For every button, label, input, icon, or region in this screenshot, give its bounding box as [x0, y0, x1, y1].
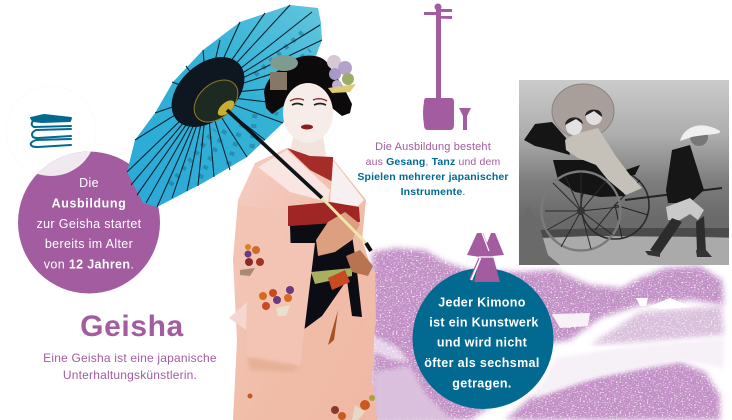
training age text: von 12 Jahren. — [44, 258, 134, 272]
kimono text: und wird nicht — [437, 336, 528, 350]
icon: books — [31, 115, 71, 147]
icon background: dotted white circle — [6, 86, 96, 176]
hair — [264, 56, 352, 116]
training age text: zur Geisha startet — [37, 217, 142, 231]
umbrella shadows of leaves — [170, 30, 310, 185]
dotted overlap of the circles — [38, 152, 91, 176]
icon: shamisen — [423, 4, 471, 130]
icon: kimono — [467, 233, 504, 282]
kimono text — [424, 296, 540, 390]
photo puller — [666, 145, 704, 203]
face — [283, 83, 333, 143]
field highlight — [534, 338, 724, 398]
kimono flower patterns — [240, 244, 375, 420]
photo: rickshaw — [519, 80, 729, 265]
subtitle: Unterhaltungskünstlerin. — [63, 368, 197, 382]
training text — [357, 141, 509, 198]
training age text: Die — [79, 176, 99, 190]
collar — [287, 148, 333, 182]
kimono text: öfter als sechsmal — [424, 356, 540, 370]
umbrella — [127, 5, 322, 207]
subtitle — [43, 351, 217, 382]
training age text: bereits im Alter — [45, 237, 133, 251]
photo front wheel — [542, 172, 620, 250]
meadow — [590, 306, 724, 345]
kimono text: ist ein Kunstwerk — [429, 316, 539, 330]
title: Geisha — [80, 310, 184, 343]
obi — [288, 202, 360, 226]
hair flowers — [327, 55, 356, 93]
training text: aus Gesang, Tanz und dem — [366, 156, 500, 168]
umbrella shaft — [227, 110, 322, 198]
left sleeve — [233, 205, 315, 366]
training text: Die Ausbildung besteht — [375, 141, 491, 153]
hands — [316, 212, 360, 256]
hair ornament — [270, 55, 298, 90]
bridge — [552, 313, 590, 328]
river — [374, 366, 452, 420]
panel: kimono circle — [412, 268, 554, 409]
photo rear wheel — [581, 171, 649, 239]
body — [233, 148, 377, 420]
black underbelt — [290, 222, 362, 330]
umbrella hub — [158, 43, 258, 141]
photo ground — [519, 233, 729, 265]
photo women — [565, 128, 642, 195]
training text: Instrumente. — [401, 186, 465, 198]
training text: Spielen mehrerer japanischer — [357, 171, 509, 183]
subtitle: Eine Geisha ist eine japanische — [43, 351, 217, 365]
geisha — [227, 55, 377, 420]
training age text — [37, 176, 142, 272]
plectrum — [459, 108, 471, 130]
photo carriage — [524, 122, 570, 155]
photo parasol — [552, 84, 614, 138]
landscape engraving background — [372, 248, 724, 420]
neck — [290, 130, 326, 170]
umbrella ribs — [127, 5, 322, 207]
kimono text: getragen. — [452, 376, 512, 390]
training age text: Ausbildung — [52, 196, 126, 210]
house — [636, 298, 692, 309]
white clearings — [372, 335, 410, 362]
kimono text: Jeder Kimono — [438, 296, 526, 310]
panel: training age circle — [18, 152, 160, 294]
right sleeve — [362, 270, 376, 330]
